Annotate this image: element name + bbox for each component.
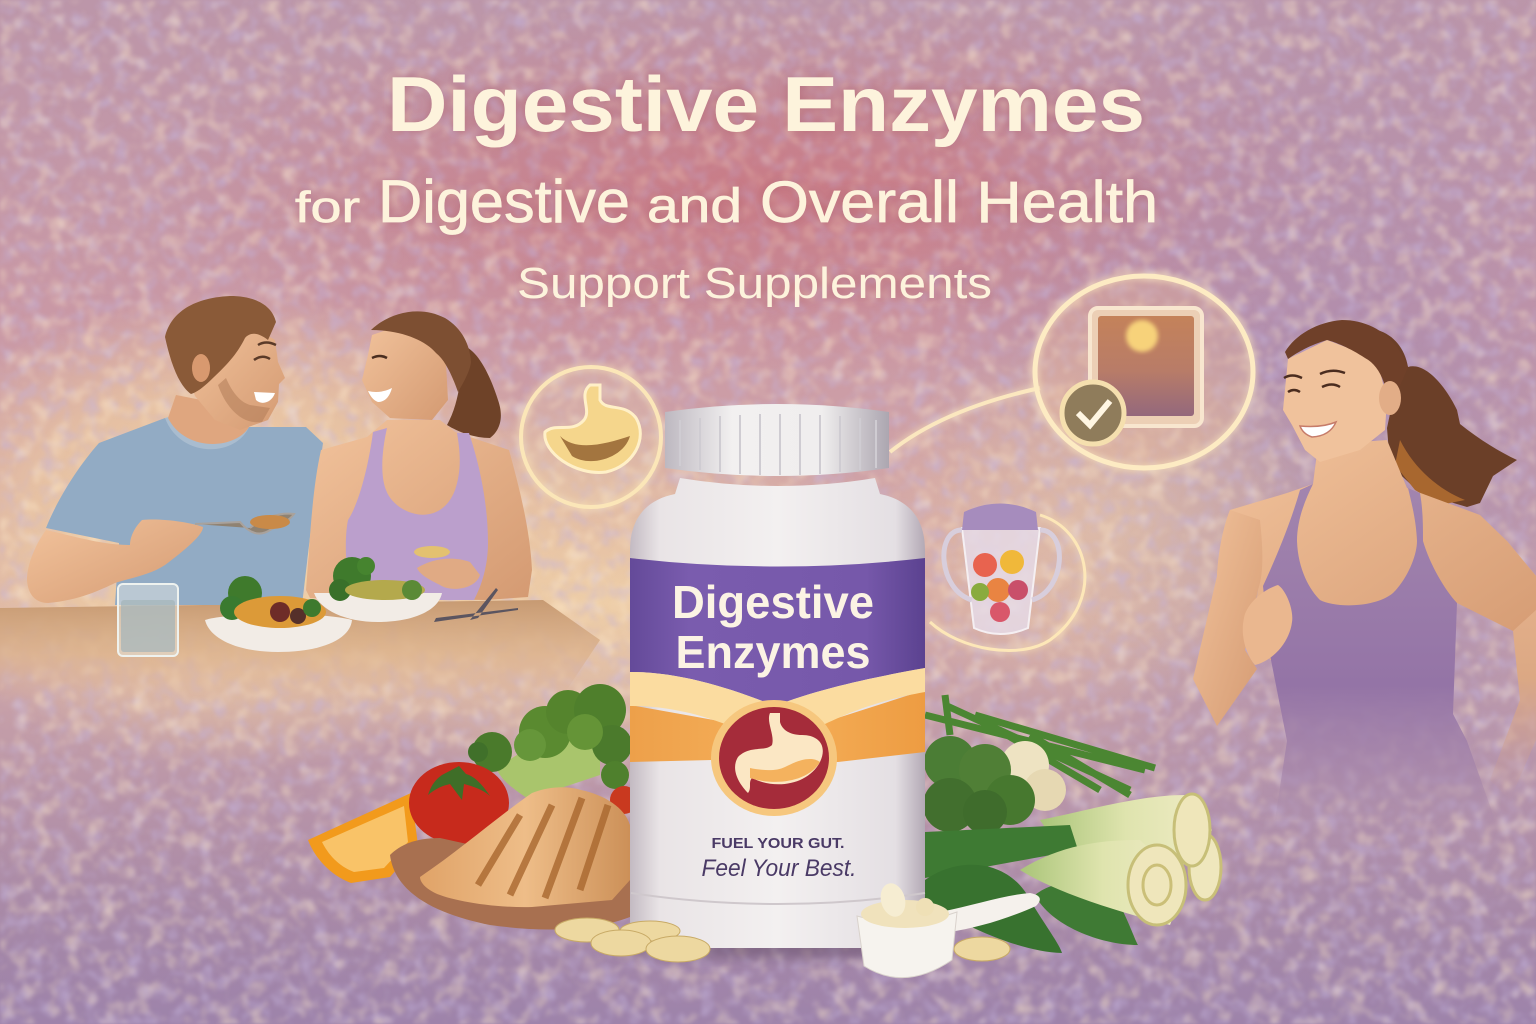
tomato (409, 762, 509, 844)
slogan (702, 835, 856, 882)
skin (306, 420, 532, 600)
spinach leaves (925, 865, 1138, 953)
smile (1300, 422, 1336, 437)
heading: Digestive Enzymes: Digestive Enzymes (387, 60, 1145, 148)
spoon with food (195, 514, 294, 534)
slogan: Feel Your Best. (702, 855, 856, 882)
stubble (218, 378, 270, 422)
face (1283, 340, 1387, 462)
cap (665, 404, 889, 476)
plate front (205, 576, 352, 652)
orange band (630, 690, 925, 762)
plate back (314, 557, 442, 622)
ponytail and hair back (1377, 330, 1517, 507)
food: left group (308, 684, 638, 930)
face (186, 322, 285, 430)
fist (1243, 585, 1292, 665)
subheading: for Digestive and Overall Health: for (295, 183, 360, 232)
food: right group (923, 695, 1221, 953)
torso and shoulders (1217, 440, 1536, 660)
arm (27, 519, 203, 603)
eye (254, 342, 276, 360)
hair top (1285, 320, 1408, 400)
smile (368, 388, 392, 402)
woman (306, 311, 532, 600)
icon: tablet with checkmark (1035, 276, 1253, 468)
connector line: bottle to tablet (890, 388, 1040, 452)
illustration: couple eating at table (0, 296, 600, 700)
man (27, 296, 323, 605)
subheading: for Digestive and Overall Health: Digestive (378, 168, 630, 235)
tank top (346, 428, 488, 600)
supplement bottle (608, 404, 948, 958)
face (362, 322, 448, 420)
hand (417, 559, 480, 589)
hair (165, 296, 276, 394)
plate of grilled chicken (390, 787, 630, 930)
measuring scoop (857, 880, 1040, 978)
left arm (1193, 510, 1262, 726)
stomach badge (711, 700, 837, 816)
hair (371, 311, 471, 392)
softgel capsules (555, 918, 1010, 962)
green onions (925, 825, 1078, 878)
body (630, 478, 925, 948)
label text: Digestive (672, 576, 874, 628)
ear (1379, 381, 1401, 415)
tomato behind bottle (610, 786, 638, 814)
subheading: for Digestive and Overall Health: Overall Health (760, 170, 1158, 235)
phone and cutlery (434, 588, 518, 622)
bottle shadow (608, 938, 948, 958)
slogan: FUEL YOUR GUT. (712, 835, 844, 852)
right arm (1457, 530, 1536, 800)
subheading: for Digestive and Overall Health (295, 168, 1158, 235)
table (0, 600, 600, 700)
broccoli (468, 684, 632, 800)
subheading: Support Supplements: Support Supplements (517, 259, 992, 308)
cream ribbon (630, 668, 925, 724)
neck (168, 395, 252, 444)
cauliflower (1001, 741, 1066, 811)
ponytail (447, 345, 501, 438)
smile (254, 392, 275, 403)
tank top (1263, 484, 1495, 820)
torso shirt (46, 418, 323, 605)
glass of water (118, 584, 178, 656)
broccoli (923, 736, 1035, 834)
subheading: for Digestive and Overall Health: and (647, 180, 742, 233)
base groove (631, 893, 925, 904)
title block (295, 60, 1158, 308)
front fennel (1020, 840, 1186, 925)
orange slice (308, 793, 418, 883)
eye (372, 356, 387, 358)
back fennel (1189, 834, 1221, 900)
icon: blender jar with fruit (930, 504, 1085, 650)
green beans (925, 695, 1155, 795)
ear (192, 354, 210, 382)
purple label (630, 558, 925, 706)
label text (672, 576, 874, 678)
runner woman (1193, 320, 1536, 820)
eyes and brows (1284, 371, 1345, 392)
top fennel (1040, 794, 1212, 866)
label text: Enzymes (676, 626, 870, 678)
icon: stomach circle (521, 367, 661, 507)
